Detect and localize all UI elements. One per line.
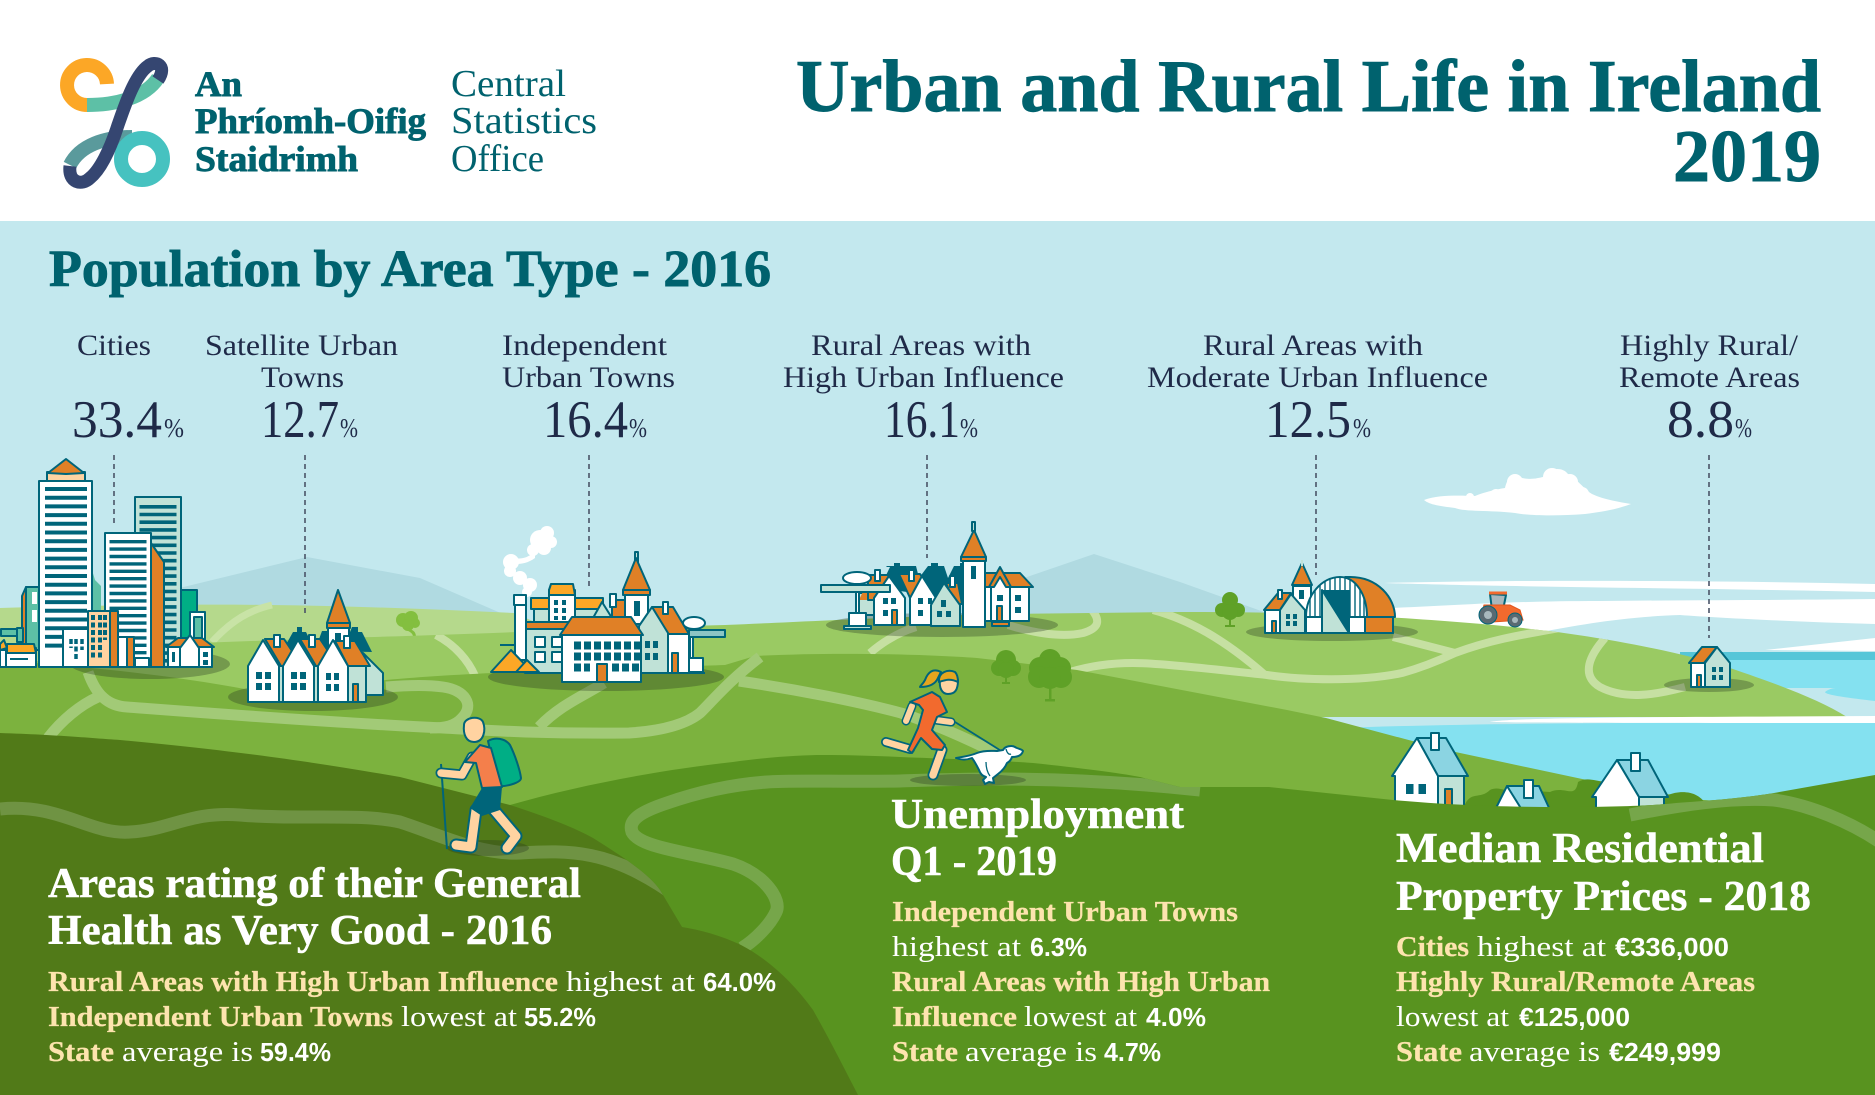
trees near the runner — [991, 649, 1072, 702]
text block: highest at — [892, 932, 1021, 963]
logo text: Irish name: An — [195, 64, 242, 104]
text block: State — [1396, 1037, 1462, 1068]
icon: coastal bushes — [1464, 779, 1707, 807]
text block — [48, 967, 776, 1068]
heading — [1396, 826, 1811, 920]
logo text: English name: Statistics — [451, 100, 597, 142]
front leg — [456, 810, 476, 847]
sea behind the far hill — [1680, 652, 1875, 701]
label: rural areas with high urban influence: Rural Areas with — [811, 329, 1031, 362]
heading: Unemployment — [891, 792, 1184, 838]
heading — [48, 861, 581, 954]
logo text: Irish name: Staidrimh — [195, 139, 358, 179]
road on darkest hill — [0, 808, 670, 892]
label: rural areas with high urban influence: % — [960, 413, 978, 443]
text block: Influence — [892, 1002, 1017, 1033]
shadow — [1664, 678, 1754, 692]
text block — [1396, 932, 1755, 1068]
cloud — [1424, 468, 1631, 515]
lower green hill — [400, 755, 1875, 1095]
logo text: English name: Central — [451, 63, 566, 105]
shadow — [447, 840, 529, 856]
white cloud bands on the horizon — [1384, 581, 1875, 651]
small gable and orange roof — [612, 600, 625, 618]
pale road on back hill — [212, 605, 272, 642]
house 3 pale — [931, 576, 960, 626]
label: highly rural remote areas: 8.8 — [1667, 391, 1734, 449]
church steeple — [327, 590, 350, 652]
heading: Median Residential — [1396, 826, 1764, 872]
house — [1264, 590, 1305, 633]
roads on lower green hill — [631, 779, 1875, 948]
house: right — [1592, 753, 1668, 812]
panel: highly rural house illustration — [1664, 647, 1754, 692]
panel: independent urban towns illustration — [488, 526, 725, 691]
label: highly rural remote areas — [1619, 329, 1800, 449]
icon: hiker — [441, 718, 529, 856]
panel: rural areas with moderate urban influence illustration — [1215, 560, 1418, 641]
white shoreline stripe — [1490, 716, 1875, 723]
panel: property prices — [1396, 826, 1811, 1068]
title: 2019 — [1673, 116, 1821, 198]
text block: lowest at — [1024, 1002, 1137, 1033]
label: satellite urban towns: Towns — [261, 361, 344, 394]
logo text: English name: Office — [451, 138, 544, 180]
smoke — [503, 526, 557, 597]
text block: 59.4% — [260, 1037, 331, 1067]
text block: €336,000 — [1615, 932, 1729, 962]
shadow — [910, 774, 1026, 786]
pale house with orange roof — [639, 602, 689, 673]
text block: 6.3% — [1030, 932, 1087, 962]
pole — [441, 764, 447, 849]
logo mark — [67, 64, 163, 182]
panel: cities illustration — [0, 459, 230, 679]
label: rural areas with high urban influence: High Urban Influence — [783, 361, 1064, 394]
label: highly rural remote areas: % — [1735, 413, 1752, 443]
front hill — [0, 654, 1875, 1095]
panel: general health — [48, 861, 776, 1068]
text block: €125,000 — [1519, 1002, 1630, 1032]
text block: Rural Areas with High Urban Influence — [48, 967, 558, 998]
house 2 — [283, 635, 338, 702]
shadow — [228, 683, 398, 711]
factory — [491, 595, 571, 673]
roads on front hill — [48, 657, 1000, 755]
roads on middle hill — [436, 610, 1685, 695]
steeple — [1292, 560, 1312, 610]
label: rural areas with moderate urban influence: % — [1353, 413, 1371, 443]
tree: small — [396, 611, 420, 637]
label: satellite urban towns: % — [340, 413, 358, 443]
text block: €249,999 — [1609, 1037, 1721, 1067]
label: rural areas with high urban influence: 16.1 — [884, 391, 960, 449]
text block: lowest at — [1396, 1002, 1509, 1033]
logo text: English name — [451, 63, 597, 180]
label: rural areas with moderate urban influence — [1147, 329, 1488, 449]
text block — [892, 897, 1270, 1068]
text block: Independent Urban Towns — [892, 897, 1238, 928]
body — [908, 692, 947, 753]
logo text: Irish name: Phríomh-Oifig — [195, 101, 426, 141]
small right houses — [166, 635, 214, 667]
text block: Independent Urban Towns — [48, 1002, 393, 1033]
text block: Cities — [1396, 932, 1469, 963]
label: satellite urban towns: 12.7 — [261, 391, 339, 449]
text block: lowest at — [401, 1002, 517, 1033]
logo: Central Statistics Office — [67, 63, 597, 182]
title: Urban and Rural Life in Ireland — [796, 46, 1821, 128]
house 2 — [909, 570, 936, 625]
head and hair — [920, 670, 958, 694]
label: independent urban towns — [502, 329, 675, 449]
panel: rural areas with high urban influence illustration — [821, 522, 1058, 637]
label: rural areas with moderate urban influence: Rural Areas with — [1203, 329, 1423, 362]
label: satellite urban towns — [205, 329, 398, 449]
label: cities — [72, 329, 184, 449]
label: independent urban towns: 16.4 — [543, 391, 628, 449]
shorts — [470, 787, 502, 816]
low-rise blocks — [63, 611, 149, 667]
label: satellite urban towns: Satellite Urban — [205, 329, 398, 362]
text block: average is — [122, 1037, 253, 1068]
tree — [1215, 592, 1245, 627]
steeple — [623, 552, 650, 624]
label: highly rural remote areas: Remote Areas — [1619, 361, 1800, 394]
petrol building — [859, 593, 875, 615]
petrol station — [821, 572, 890, 629]
text block: highest at — [1477, 932, 1606, 963]
back hill — [0, 605, 600, 665]
label: cities: Cities — [77, 329, 151, 362]
heading — [891, 792, 1184, 885]
church tower — [961, 522, 986, 627]
head — [464, 718, 484, 742]
main building — [560, 617, 643, 682]
panel: satellite urban towns illustration — [228, 590, 398, 711]
label: independent urban towns: % — [629, 413, 647, 443]
logo text: Irish name — [195, 64, 426, 179]
text block: Rural Areas with High Urban — [892, 967, 1270, 998]
heading: population by area type: Population by Area Type - 2016 — [49, 241, 771, 298]
heading: Property Prices - 2018 — [1396, 874, 1811, 920]
backpack — [488, 739, 521, 786]
back building with yellow roofs — [531, 584, 604, 622]
title — [796, 46, 1821, 198]
shadow — [1246, 623, 1418, 641]
house 3 — [318, 636, 370, 702]
house: large — [1392, 733, 1468, 810]
text block: 64.0% — [703, 967, 776, 997]
house — [1689, 647, 1730, 687]
label: rural areas with moderate urban influence: Moderate Urban Influence — [1147, 361, 1488, 394]
label: cities: 33.4 — [72, 391, 162, 449]
heading: Health as Very Good - 2016 — [48, 908, 552, 954]
darkest left hill — [0, 733, 858, 1095]
orange roofs — [868, 575, 889, 600]
label: cities: % — [164, 413, 184, 443]
text block: Highly Rural/Remote Areas — [1396, 967, 1755, 998]
text block: 55.2% — [524, 1002, 596, 1032]
text block: average is — [1469, 1037, 1600, 1068]
sky background — [0, 221, 1875, 1095]
category labels and percentages — [72, 329, 1800, 449]
shadow — [826, 613, 1058, 637]
icon: tractor — [1479, 593, 1523, 627]
tower: tallest — [39, 459, 92, 667]
text block: 4.0% — [1146, 1002, 1206, 1032]
label: highly rural remote areas: Highly Rural/ — [1620, 329, 1799, 362]
heading: Q1 - 2019 — [891, 839, 1057, 885]
dark roofs behind — [880, 563, 966, 600]
dog — [956, 746, 1023, 784]
text block: State — [48, 1037, 114, 1068]
middle hill — [0, 612, 1847, 760]
house 1 — [874, 570, 905, 625]
left low buildings — [0, 628, 36, 667]
arm — [441, 757, 472, 775]
dark roofs behind — [283, 627, 372, 652]
label: rural areas with moderate urban influence: 12.5 — [1265, 391, 1351, 449]
barn — [1306, 575, 1395, 633]
back buildings — [22, 587, 26, 650]
tower: mid with orange side — [105, 533, 164, 667]
shadow — [488, 663, 724, 691]
house: small — [1495, 780, 1550, 810]
dashed leader lines — [114, 455, 1709, 638]
icon: runner with dog — [886, 670, 1026, 786]
shadow — [70, 649, 230, 679]
panel: unemployment — [891, 792, 1270, 1068]
front leg — [933, 750, 942, 775]
label: independent urban towns: Independent — [502, 329, 668, 362]
torso — [465, 745, 502, 788]
rear leg — [886, 742, 910, 749]
text block: highest at — [566, 967, 695, 998]
text block: 4.7% — [1104, 1037, 1161, 1067]
text block: State — [892, 1037, 958, 1068]
label: rural areas with high urban influence — [783, 329, 1064, 449]
sea in the foreground bay — [1340, 722, 1875, 900]
label: independent urban towns: Urban Towns — [502, 361, 675, 394]
house 1 — [248, 635, 302, 702]
back leg — [494, 810, 516, 848]
text block: average is — [965, 1037, 1097, 1068]
back pale house — [363, 653, 383, 695]
right side houses — [985, 567, 1033, 626]
leash — [955, 722, 1003, 752]
tower: pale — [135, 497, 181, 667]
panel: coastal houses — [1392, 733, 1668, 812]
petrol station — [683, 617, 725, 674]
mountains — [130, 554, 1264, 640]
arms — [936, 720, 951, 722]
heading: Areas rating of their General — [48, 861, 581, 907]
